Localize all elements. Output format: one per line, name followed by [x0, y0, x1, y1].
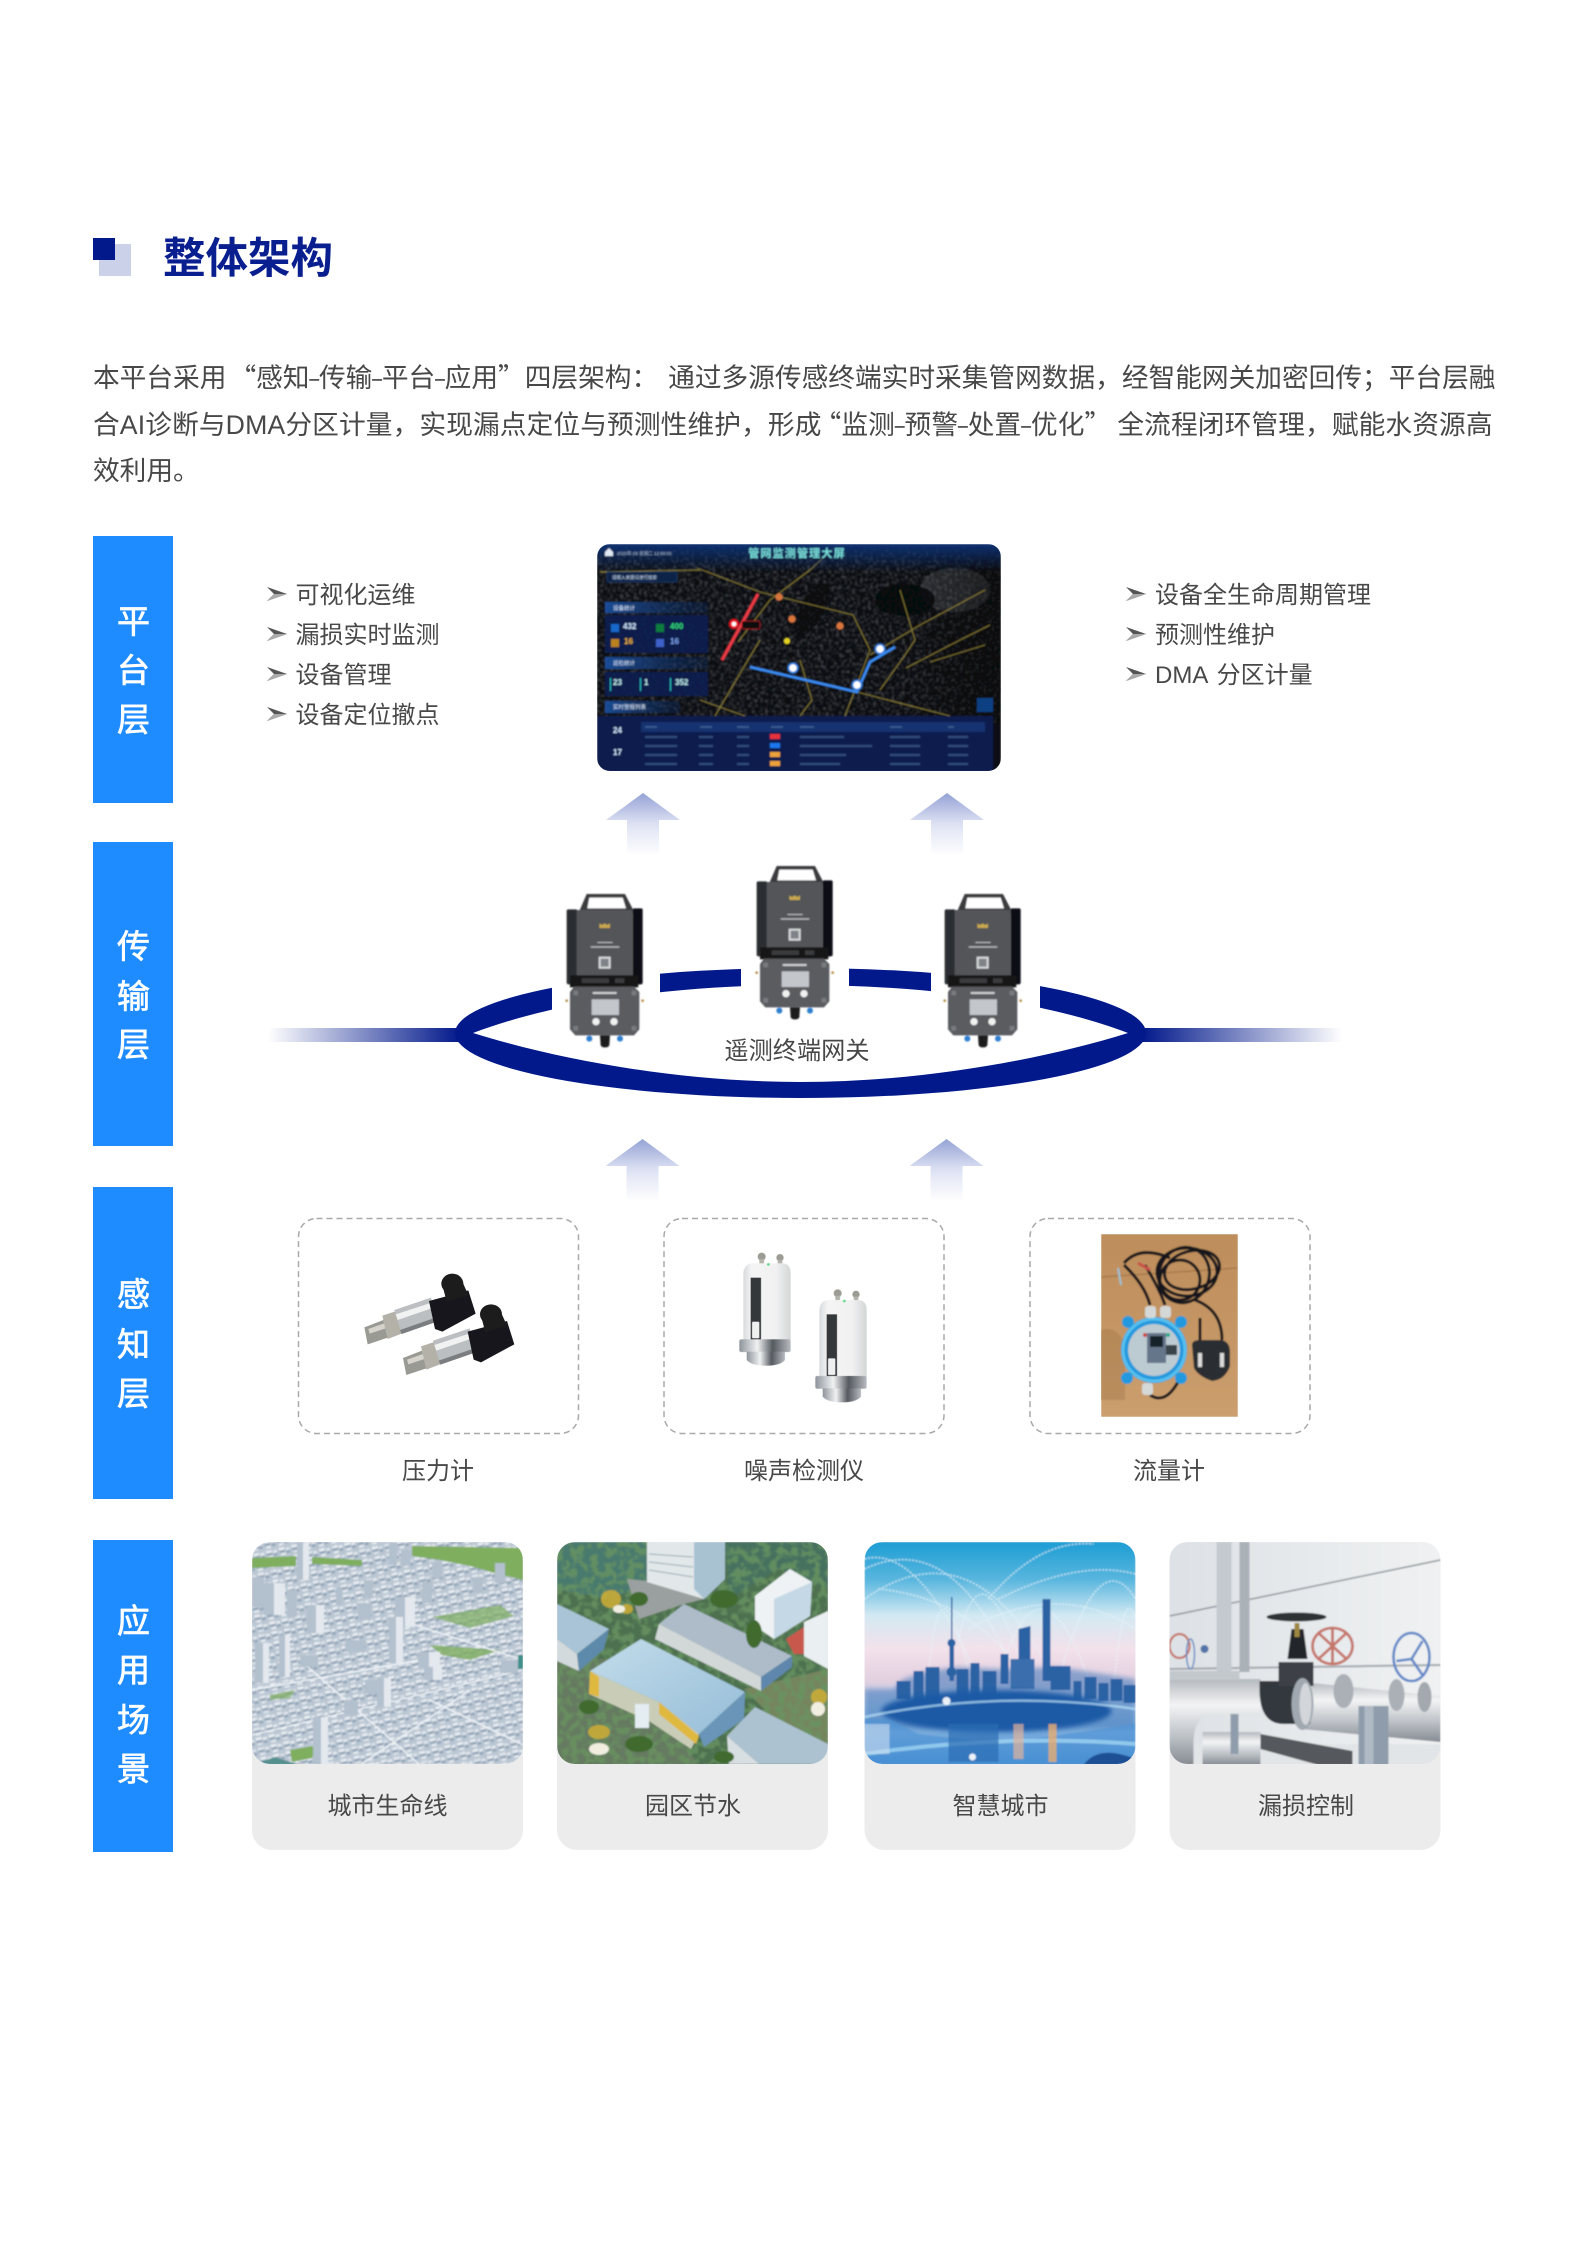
right feature list — [1126, 582, 1371, 689]
intro paragraph: – — [310, 369, 320, 388]
arrow: transport to platform right — [910, 793, 984, 856]
panel: platform layer tab: 平 — [117, 603, 150, 640]
panel: device stats: 16 — [670, 637, 679, 646]
intro paragraph: – — [895, 416, 905, 435]
caption: 噪声检测仪 — [744, 1458, 864, 1485]
left feature list — [267, 582, 440, 729]
panel: application layer tab: 场 — [117, 1702, 150, 1738]
device: gateway right — [943, 894, 1022, 1047]
intro paragraph: – — [1021, 416, 1031, 435]
panel: application layer tab: 景 — [117, 1750, 150, 1788]
panel: application layer tab: 应 — [117, 1602, 150, 1640]
panel: inspection stats: 1 — [644, 678, 649, 687]
panel: sensing layer tab: 知 — [117, 1326, 150, 1363]
network ring with side lines — [268, 955, 1342, 1098]
left feature list: 设备定位撤点 — [296, 702, 440, 729]
intro paragraph: 合AI诊断与DMA分区计量，实现漏点定位与预测性维护，形成“监测 — [93, 403, 895, 442]
roads — [600, 544, 990, 716]
search box: 请输入关键词进行搜索 — [612, 574, 657, 581]
caption: 智慧城市 — [952, 1793, 1048, 1820]
caption: 漏损控制 — [1258, 1793, 1354, 1820]
alarm table — [597, 716, 993, 772]
panel: platform layer tab: 层 — [117, 701, 150, 738]
panel: platform layer tab: 台 — [117, 652, 150, 689]
button — [977, 698, 993, 712]
panel: platform layer tab — [93, 536, 173, 803]
intro paragraph: ”全流程闭环管理，赋能水资源高 — [1085, 403, 1493, 442]
panel: application layer tab — [93, 1540, 173, 1852]
intro paragraph: 处置 — [968, 410, 1021, 440]
intro paragraph: 优化 — [1031, 410, 1085, 440]
panel: noise detector — [664, 1218, 944, 1485]
panel: inspection stats: 352 — [675, 678, 689, 687]
panel: device stats: 16 — [624, 637, 633, 646]
panel: smart city — [864, 1542, 1136, 1850]
map markers — [775, 593, 844, 644]
red leak line — [722, 594, 760, 660]
icon: title squares — [93, 238, 131, 276]
left feature list: 设备管理 — [296, 662, 392, 689]
panel: application layer tab: 用 — [117, 1652, 150, 1688]
device: gateway middle — [755, 866, 834, 1019]
right feature list: 预测性维护 — [1155, 622, 1275, 649]
panel: transport layer tab: 层 — [117, 1026, 150, 1063]
panel: transport layer tab: 传 — [117, 928, 150, 965]
dashboard title: 管网监测管理大屏 — [748, 546, 846, 560]
arrow: sensing to transport right — [910, 1139, 984, 1202]
left feature list: 漏损实时监测 — [296, 622, 440, 649]
panel: alarm list header — [605, 701, 680, 713]
panel: inspection stats: 巡检统计 — [613, 659, 636, 667]
map background — [597, 544, 1001, 771]
search box — [607, 572, 677, 582]
gateway label: 遥测终端网关 — [724, 1038, 870, 1065]
panel: leakage control — [1170, 1542, 1440, 1850]
panel: flow meter — [1030, 1218, 1310, 1485]
right feature list: DMA 分区计量 — [1155, 662, 1313, 689]
image: flow meter photo — [1100, 1234, 1238, 1417]
image: industrial park — [557, 1542, 828, 1765]
panel: inspection stats — [605, 657, 708, 696]
caption: 压力计 — [402, 1458, 474, 1485]
left feature list: 可视化运维 — [296, 582, 416, 609]
panel: pressure gauge — [298, 1218, 578, 1485]
home icon and date: 2025年-05 星期二 12:00:00 — [617, 550, 672, 557]
heading text: 整体架构 — [163, 236, 333, 283]
arrow: transport to platform left — [606, 793, 680, 856]
image: 3D city — [252, 1542, 523, 1765]
panel: transport layer tab: 输 — [117, 978, 150, 1015]
intro paragraph: 效利用。 — [93, 456, 200, 486]
intro paragraph: ”四层架构： 通过多源传感终端实时采集管网数据，经智能网关加密回传；平台层融 — [498, 356, 1495, 395]
dashboard screenshot — [597, 544, 1001, 772]
panel: sensing layer tab: 感 — [117, 1276, 150, 1313]
panel: transport layer tab — [93, 842, 173, 1146]
device: gateway left — [565, 894, 644, 1047]
image: noise detectors — [739, 1253, 867, 1402]
intro paragraph: 应用 — [445, 363, 498, 393]
alarm table: 17 — [613, 748, 622, 757]
panel: device stats: 432 — [623, 622, 637, 631]
intro paragraph: – — [958, 416, 968, 435]
intro paragraph: – — [435, 369, 445, 388]
blue pipeline — [750, 644, 895, 692]
image: smart skyline — [864, 1542, 1136, 1765]
intro paragraph: 传输 — [319, 363, 372, 393]
arrow: sensing to transport left — [606, 1139, 680, 1202]
panel: park water saving — [557, 1542, 828, 1850]
intro paragraph: 平台 — [382, 363, 435, 393]
panel: device stats: 400 — [670, 622, 684, 631]
panel: alarm list header: 实时警报列表 — [613, 703, 647, 711]
panel: device stats: 设备统计 — [613, 604, 636, 612]
intro paragraph — [93, 356, 1495, 486]
intro paragraph: 本平台采用“感知 — [93, 356, 310, 395]
title — [93, 236, 333, 283]
intro paragraph: – — [372, 369, 382, 388]
caption: 园区节水 — [645, 1793, 741, 1820]
intro paragraph: 预警 — [905, 410, 958, 440]
home icon and date — [605, 548, 672, 557]
panel: sensing layer tab: 层 — [117, 1375, 150, 1412]
panel: sensing layer tab — [93, 1187, 173, 1499]
image: pressure gauges — [364, 1274, 514, 1375]
caption: 流量计 — [1133, 1458, 1205, 1485]
right feature list: 设备全生命周期管理 — [1155, 582, 1371, 609]
top bar — [597, 544, 1001, 572]
panel: device stats — [605, 602, 708, 653]
caption: 城市生命线 — [328, 1793, 448, 1820]
panel: inspection stats: 23 — [613, 678, 622, 687]
alarm table: 24 — [613, 726, 622, 735]
image: valves and pipes — [1170, 1542, 1440, 1765]
panel: city lifeline — [252, 1542, 523, 1850]
